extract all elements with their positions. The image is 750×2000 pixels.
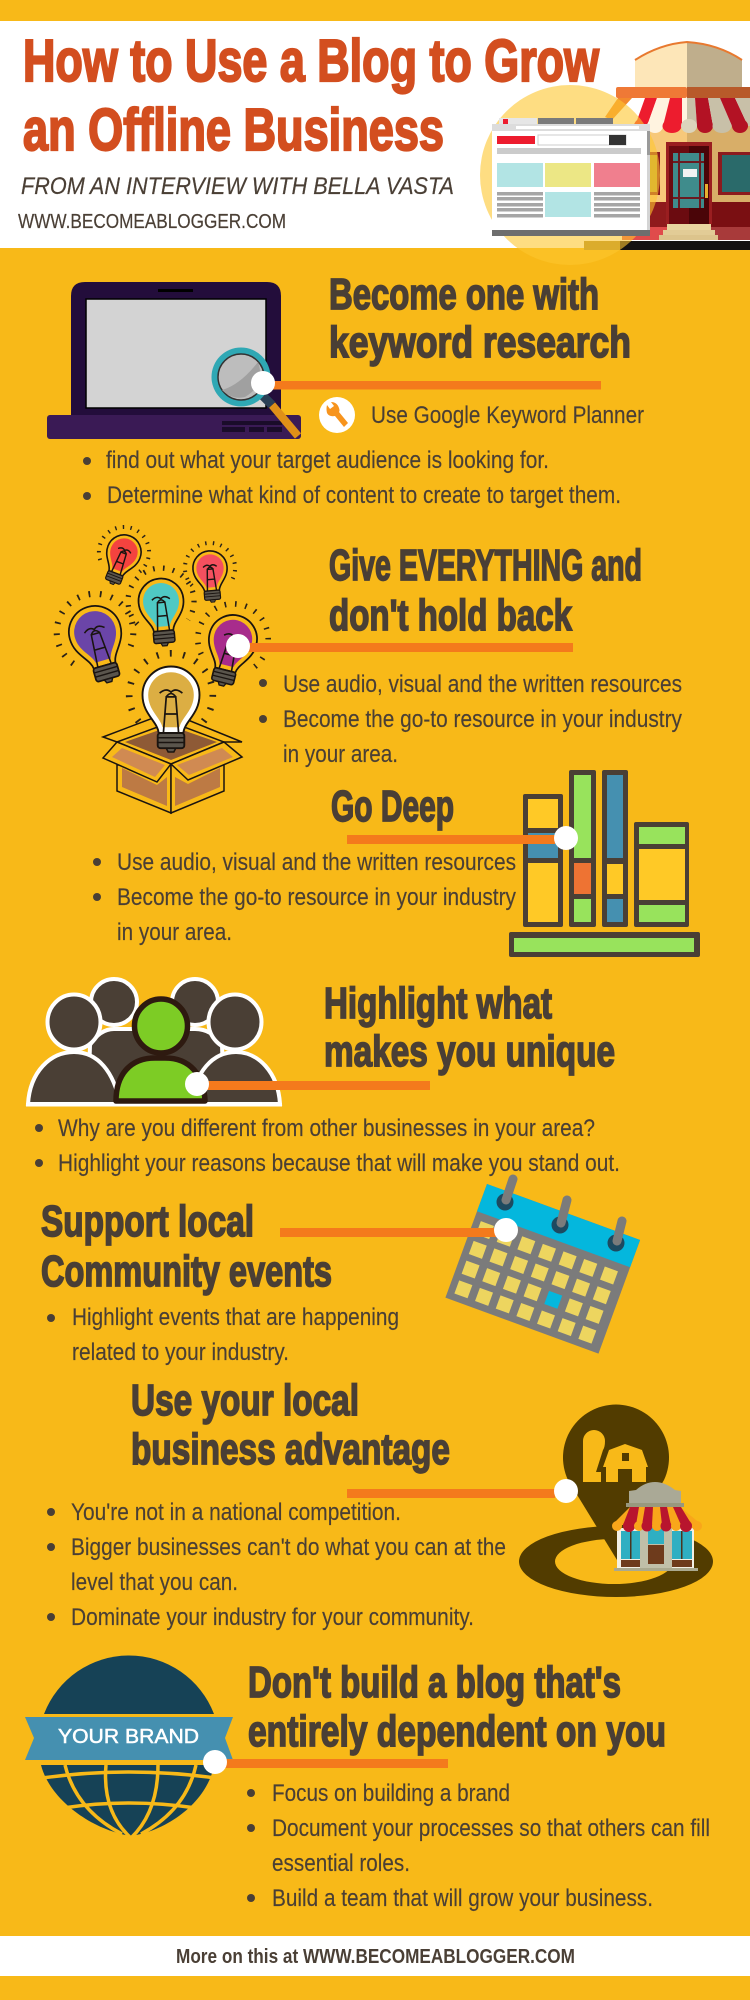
title: an Offline Business [23, 97, 444, 163]
subtitle: FROM AN INTERVIEW WITH BELLA VASTA [21, 173, 454, 200]
heading: keyword research [329, 318, 631, 367]
heading: Don't build a blog that's [248, 1658, 621, 1707]
footer banner [0, 1936, 750, 1976]
panel: header [0, 21, 750, 265]
heading: makes you unique [324, 1027, 615, 1076]
title [23, 28, 599, 163]
connector line and dot [185, 1072, 430, 1096]
bullet list: Focus on building a brand [272, 1780, 510, 1807]
bullet list: You're not in a national competition. [71, 1499, 401, 1526]
connector line and dot [251, 371, 601, 395]
bullet list: Become the go-to resource in your industry [283, 706, 683, 733]
panel: build a brand [25, 1655, 710, 1912]
bullet list: Use audio, visual and the written resources [117, 849, 516, 876]
connector line and dot [203, 1750, 448, 1774]
heading: Become one with [329, 270, 599, 319]
icon: books on shelf [509, 770, 700, 957]
icon: light bulbs in box [48, 520, 276, 813]
bullet list [83, 447, 621, 509]
bullet list: in your area. [117, 919, 232, 946]
heading: Support local [41, 1197, 254, 1246]
bullet list: Bigger businesses can't do what you can at the [71, 1534, 506, 1561]
icon: browser window [492, 118, 650, 236]
bullet list: level that you can. [71, 1569, 238, 1596]
heading [41, 1197, 332, 1296]
panel: community events [41, 1179, 640, 1366]
bullet list: Become the go-to resource in your industry [117, 884, 517, 911]
ribbon label: YOUR BRAND [58, 1726, 199, 1748]
bullet list [93, 849, 517, 946]
connector line and dot [347, 1479, 578, 1503]
icon: calendar [445, 1179, 640, 1354]
website url: WWW.BECOMEABLOGGER.COM [18, 211, 286, 233]
connector line and dot [280, 1218, 518, 1242]
panel: highlight unique [26, 979, 620, 1177]
panel: keyword research [47, 270, 644, 509]
heading [329, 270, 631, 367]
heading: Highlight what [324, 979, 552, 1028]
bullet list: Highlight events that are happening [72, 1304, 399, 1331]
bullet list: Dominate your industry for your community. [71, 1604, 474, 1631]
heading: Community events [41, 1247, 332, 1296]
bullet list [259, 671, 683, 768]
connector line and dot [226, 634, 573, 658]
heading: business advantage [131, 1425, 450, 1474]
bullet list: essential roles. [272, 1850, 410, 1877]
heading [248, 1658, 666, 1756]
heading: don't hold back [329, 591, 572, 640]
bullet list: Build a team that will grow your business. [272, 1885, 653, 1912]
icon: sun circle [480, 85, 660, 265]
panel: give everything [48, 520, 683, 813]
bullet list: Determine what kind of content to create to target them. [107, 482, 621, 509]
icon: map pin with shop [519, 1405, 713, 1597]
bullet list: Use audio, visual and the written resources [283, 671, 682, 698]
heading [131, 1376, 450, 1474]
heading [329, 541, 642, 640]
footer banner: More on this at WWW.BECOMEABLOGGER.COM [176, 1945, 575, 1968]
bullet list: Why are you different from other businesses in your area? [58, 1115, 595, 1142]
icon: storefront [584, 42, 750, 250]
bullet list [47, 1499, 506, 1631]
connector line and dot [347, 826, 578, 850]
bullet list: find out what your target audience is looking for. [106, 447, 549, 474]
heading: Use your local [131, 1376, 359, 1425]
icon: globe with ribbon [25, 1655, 233, 1838]
bullet list: Highlight your reasons because that will make you stand out. [58, 1150, 620, 1177]
tool note: Use Google Keyword Planner [371, 402, 644, 429]
bullet list [35, 1115, 620, 1177]
icon: wrench [319, 397, 355, 433]
heading [324, 979, 615, 1076]
panel: go deep [93, 770, 700, 957]
heading: Go Deep [331, 782, 454, 831]
panel: local advantage [47, 1376, 713, 1631]
icon: laptop with magnifier [47, 282, 301, 439]
bullet list [247, 1780, 710, 1912]
bullet list: in your area. [283, 741, 398, 768]
bullet list: related to your industry. [72, 1339, 289, 1366]
icon: group of people [26, 979, 282, 1106]
bullet list [47, 1304, 399, 1366]
